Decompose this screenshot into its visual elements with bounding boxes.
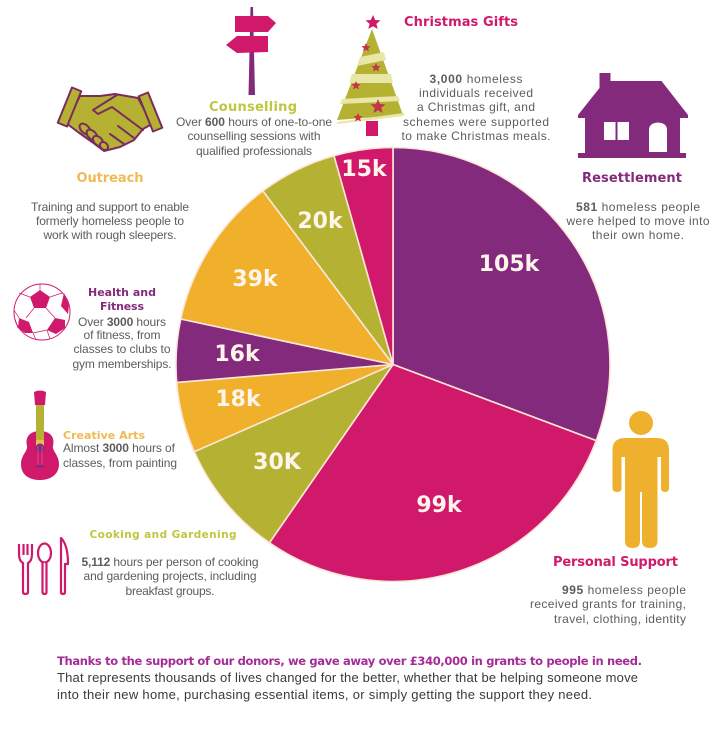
text block: 3,000 homeless (430, 72, 522, 86)
text block: breakfast groups. (126, 584, 214, 598)
text block (31, 200, 189, 242)
slice: Health and Fitness 16k (176, 319, 393, 382)
panel: Health and Fitness (14, 284, 172, 371)
footer body (57, 670, 638, 702)
text block: individuals received (419, 86, 533, 100)
icon: guitar (21, 390, 59, 480)
text block: Almost 3000 hours of (63, 441, 176, 455)
value labels: 16k (214, 342, 261, 367)
pie chart (176, 148, 610, 581)
slice: Outreach 39k (181, 191, 393, 364)
panel: Christmas Gifts (337, 15, 550, 143)
heading (88, 286, 156, 313)
slice: Resettlement 105k (393, 148, 610, 441)
text block: 5,112 hours per person of cooking (82, 555, 258, 569)
text block: were helped to move into (566, 214, 710, 228)
text block: a Christmas gift, and (417, 100, 535, 114)
text block: of fitness, from (84, 328, 160, 342)
text block: and gardening projects, including (84, 569, 256, 583)
heading: Personal Support (553, 555, 678, 570)
value labels: 39k (232, 267, 279, 292)
text block (566, 200, 710, 242)
text block (72, 315, 172, 371)
text block: classes to clubs to (74, 342, 171, 356)
slice: Personal Support 99k (269, 364, 596, 581)
text block (402, 72, 550, 143)
slice: Creative Arts 18k (177, 364, 393, 452)
text block: schemes were supported (403, 115, 549, 129)
slice: Counselling 20k (263, 156, 393, 364)
heading: Creative Arts (63, 429, 145, 442)
footer body: That represents thousands of lives changed for the better, whether that be helping someone move (57, 670, 638, 685)
panel: Resettlement (566, 73, 710, 242)
footer text (57, 654, 642, 702)
text block (63, 441, 177, 470)
value labels: 30K (253, 450, 302, 475)
value labels: 99k (416, 493, 463, 518)
icon: Christmas tree (337, 15, 404, 136)
text block: counselling sessions with (188, 129, 320, 143)
panel: Outreach (31, 88, 189, 242)
icon: handshake (58, 88, 162, 152)
icon: person (612, 411, 669, 548)
value labels: 15k (341, 157, 388, 182)
panel: Creative Arts (21, 390, 177, 480)
heading: Resettlement (582, 171, 682, 186)
icon: football (14, 284, 70, 340)
panel: Personal Support (530, 411, 686, 626)
text block: formerly homeless people to (36, 214, 184, 228)
value labels: 20k (297, 209, 344, 234)
text block: 995 homeless people (562, 583, 686, 597)
value labels: 105k (479, 252, 541, 277)
icon: signpost (226, 7, 276, 95)
text block: Over 600 hours of one-to-one (176, 115, 332, 129)
footer body: into their new home, purchasing essential items, or simply getting the support they need. (57, 687, 592, 702)
heading: Outreach (76, 171, 144, 186)
heading: Christmas Gifts (404, 15, 518, 30)
text block: Training and support to enable (31, 200, 189, 214)
heading: Health and (88, 286, 156, 299)
text block: travel, clothing, identity (554, 612, 686, 626)
value labels: 18k (215, 387, 262, 412)
heading: Fitness (100, 300, 144, 313)
text block (176, 115, 332, 158)
footer headline: Thanks to the support of our donors, we gave away over £340,000 in grants to people in need. (57, 654, 642, 668)
text block: work with rough sleepers. (42, 228, 176, 242)
text block (530, 583, 686, 626)
text block: 581 homeless people (576, 200, 700, 214)
panel: Counselling (176, 7, 332, 158)
text block: their own home. (592, 228, 684, 242)
text block: classes, from painting (63, 456, 177, 470)
heading: Cooking and Gardening (90, 529, 236, 541)
value labels (214, 157, 541, 518)
icon: house (578, 73, 688, 158)
text block (82, 555, 258, 598)
text block: received grants for training, (530, 597, 686, 611)
slice: Christmas Gifts 15k (334, 148, 393, 364)
panel: Cooking and Gardening (19, 529, 258, 598)
slice: Cooking and Gardening 30K (194, 364, 393, 543)
text block: to make Christmas meals. (402, 129, 550, 143)
heading: Counselling (209, 100, 297, 115)
text block: gym memberships. (72, 357, 172, 371)
text block: qualified professionals (196, 144, 312, 158)
icon: cutlery (19, 538, 68, 594)
text block: Over 3000 hours (78, 315, 166, 329)
